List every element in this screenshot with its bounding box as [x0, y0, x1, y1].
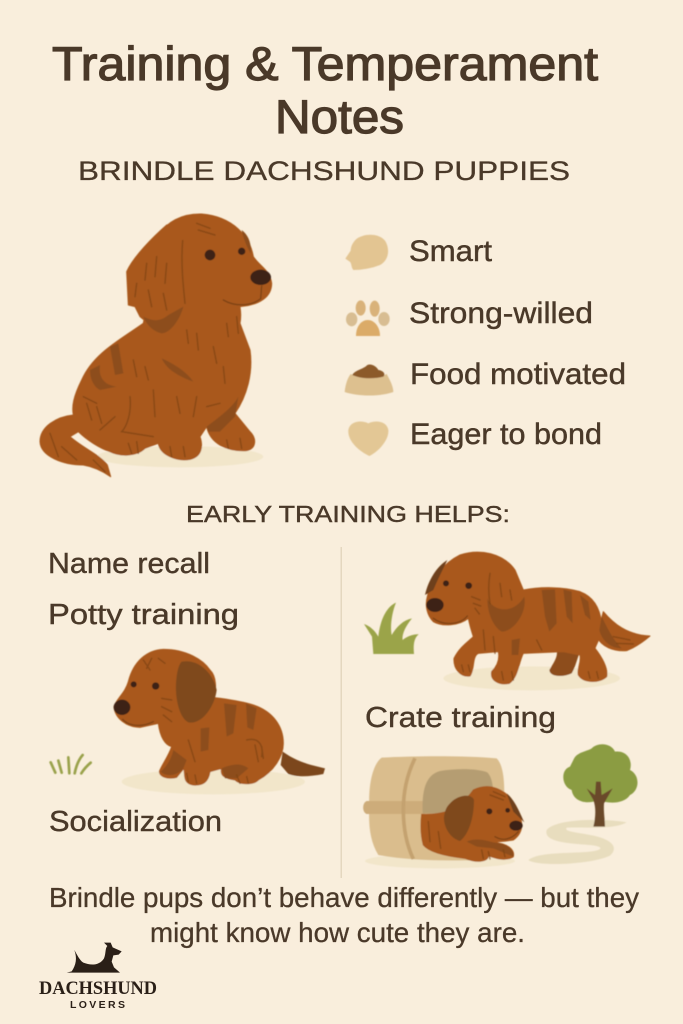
logo: Dachshund Lovers [39, 943, 157, 1011]
label: socialization: Socialization [49, 806, 222, 838]
icon: paw [346, 300, 390, 336]
section heading: EARLY TRAINING HELPS: [186, 501, 510, 527]
tagline: LOVERS [70, 999, 125, 1011]
label: smart: Smart [409, 235, 493, 268]
closing note [49, 882, 639, 948]
title: Notes [275, 90, 404, 143]
label: strong-willed: Strong-willed [409, 297, 593, 330]
label: name recall: Name recall [48, 548, 210, 580]
sandy path [528, 820, 627, 864]
illustration: puppy in crate, tree and path [363, 744, 637, 868]
icon: dachshund silhouette [67, 943, 122, 973]
title: Training & Temperament [52, 37, 598, 90]
wordmark: DACHSHUND [39, 979, 157, 999]
icon: heart [348, 422, 388, 456]
closing note: might know how cute they are. [150, 917, 525, 948]
crate [363, 756, 504, 860]
icon: head [345, 235, 388, 270]
label: food motivated: Food motivated [410, 358, 626, 391]
label: eager to bond: Eager to bond [410, 418, 602, 451]
tree [563, 744, 637, 827]
crated puppy [421, 787, 524, 861]
label: potty training: Potty training [48, 599, 239, 631]
illustration: walking puppy with grass [364, 552, 650, 690]
illustration: crouching puppy with grass [51, 649, 325, 794]
icon: food bowl [345, 365, 393, 395]
illustration: sitting brindle puppy [40, 214, 272, 477]
label: crate training: Crate training [365, 702, 556, 734]
title [52, 37, 598, 143]
trait list [345, 235, 626, 456]
subtitle: BRINDLE DACHSHUND PUPPIES [78, 156, 570, 186]
closing note: Brindle pups don’t behave differently — but they [49, 882, 639, 913]
